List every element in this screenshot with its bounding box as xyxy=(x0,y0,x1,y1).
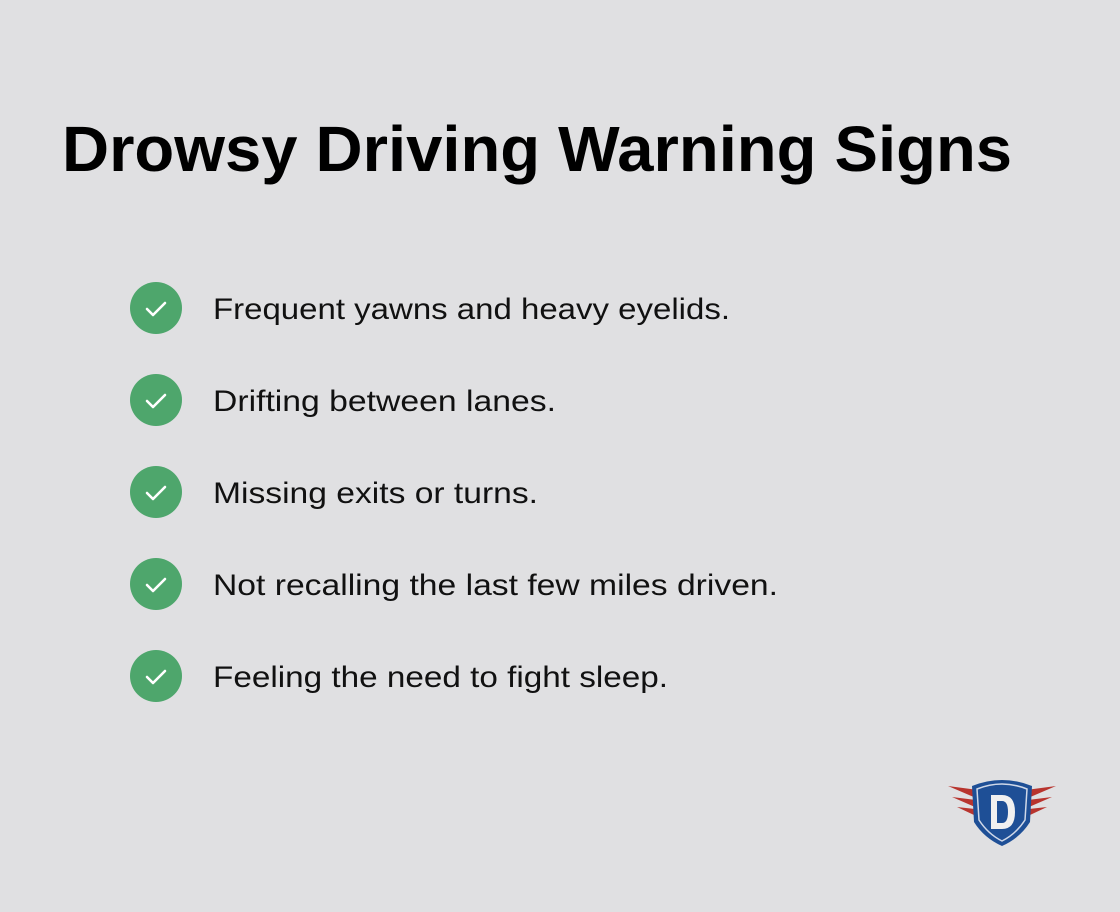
item 2 xyxy=(130,374,556,426)
item 1: Frequent yawns and heavy eyelids. xyxy=(213,293,730,326)
item 3: Missing exits or turns. xyxy=(213,477,538,510)
logo: winged shield xyxy=(948,780,1056,846)
title: Drowsy Driving Warning Signs xyxy=(62,113,1012,185)
item 2: Drifting between lanes. xyxy=(213,385,556,418)
item 1 xyxy=(130,282,730,334)
item 3 xyxy=(130,466,538,518)
item 4 xyxy=(130,558,778,610)
item 5: Feeling the need to fight sleep. xyxy=(213,661,668,694)
item 5 xyxy=(130,650,668,702)
list: warning signs xyxy=(130,282,778,702)
item 4: Not recalling the last few miles driven. xyxy=(213,569,778,602)
